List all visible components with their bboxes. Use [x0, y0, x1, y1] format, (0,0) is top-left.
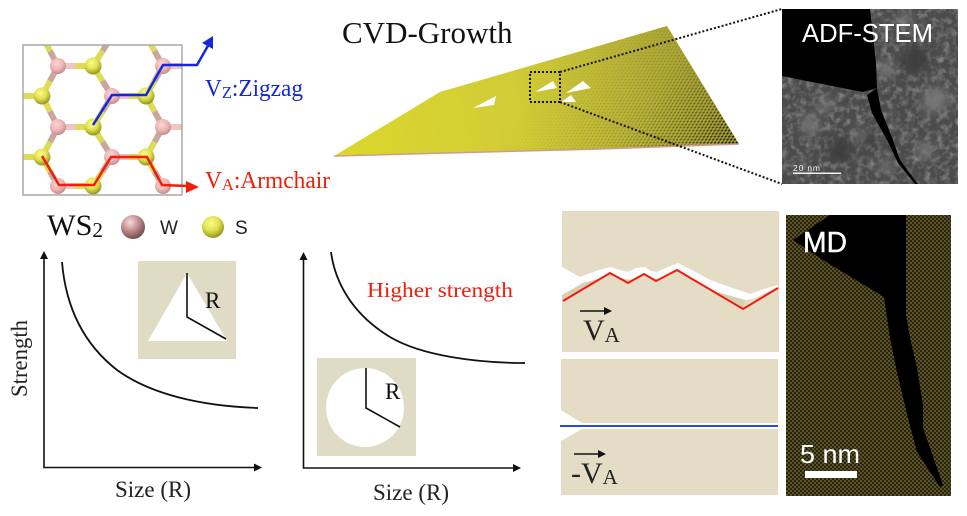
label: armchair: :Armchair	[234, 168, 330, 194]
y label: Strength	[7, 320, 32, 397]
legend: WS2 atoms: S	[235, 218, 248, 239]
holes in flake	[473, 81, 591, 108]
legend: WS2 atoms: W	[160, 218, 178, 239]
legend: WS2 atoms	[47, 209, 248, 242]
label: V	[583, 314, 605, 347]
label: zigzag: :Zigzag	[232, 76, 303, 102]
curve	[331, 252, 525, 363]
panel: MD simulation	[786, 215, 951, 496]
dotted zoom box and connector lines	[530, 9, 782, 184]
scale bar: 20 nm	[793, 163, 820, 173]
scale bar	[793, 163, 841, 174]
inset: triangle hole: R	[205, 288, 221, 313]
panel: zigzag crack simulation	[560, 359, 778, 495]
panel: armchair crack simulation	[562, 211, 779, 352]
legend: WS2 atoms: WS	[47, 209, 92, 242]
curve	[62, 262, 258, 408]
panel: WS2 lattice structure	[20, 36, 190, 195]
label: armchair: V	[205, 168, 222, 194]
chart: triangle hole strength vs size	[7, 251, 262, 502]
x label: Size (R)	[115, 477, 191, 502]
crack line	[560, 425, 778, 427]
inset: circular hole: R	[385, 379, 401, 404]
label: ADF-STEM	[802, 18, 933, 48]
arrow	[580, 307, 612, 315]
annotation: Higher strength	[367, 278, 514, 302]
arrow: zigzag direction	[93, 36, 213, 125]
legend: WS2 atoms: 2	[92, 218, 103, 242]
axes	[300, 252, 521, 472]
label: -V	[571, 457, 603, 490]
scale bar: 5 nm	[800, 439, 860, 469]
inset: circular hole	[317, 358, 416, 456]
label: A	[605, 323, 621, 347]
label: armchair: A	[222, 175, 235, 194]
label: A	[603, 465, 619, 489]
axes	[40, 251, 262, 472]
arrow	[574, 450, 606, 458]
chart: circular hole strength vs size	[300, 252, 525, 505]
arrow: armchair direction	[42, 156, 199, 193]
title: CVD-Growth: CVD-Growth	[342, 15, 513, 50]
label: MD	[803, 227, 847, 259]
image: ADF-STEM micrograph	[782, 9, 958, 184]
inset: triangle hole	[138, 261, 236, 359]
flake: CVD grown WS2 sheet	[334, 26, 739, 156]
label: zigzag: Z	[222, 83, 232, 102]
x label: Size (R)	[373, 480, 449, 505]
label: zigzag: V	[205, 76, 222, 102]
